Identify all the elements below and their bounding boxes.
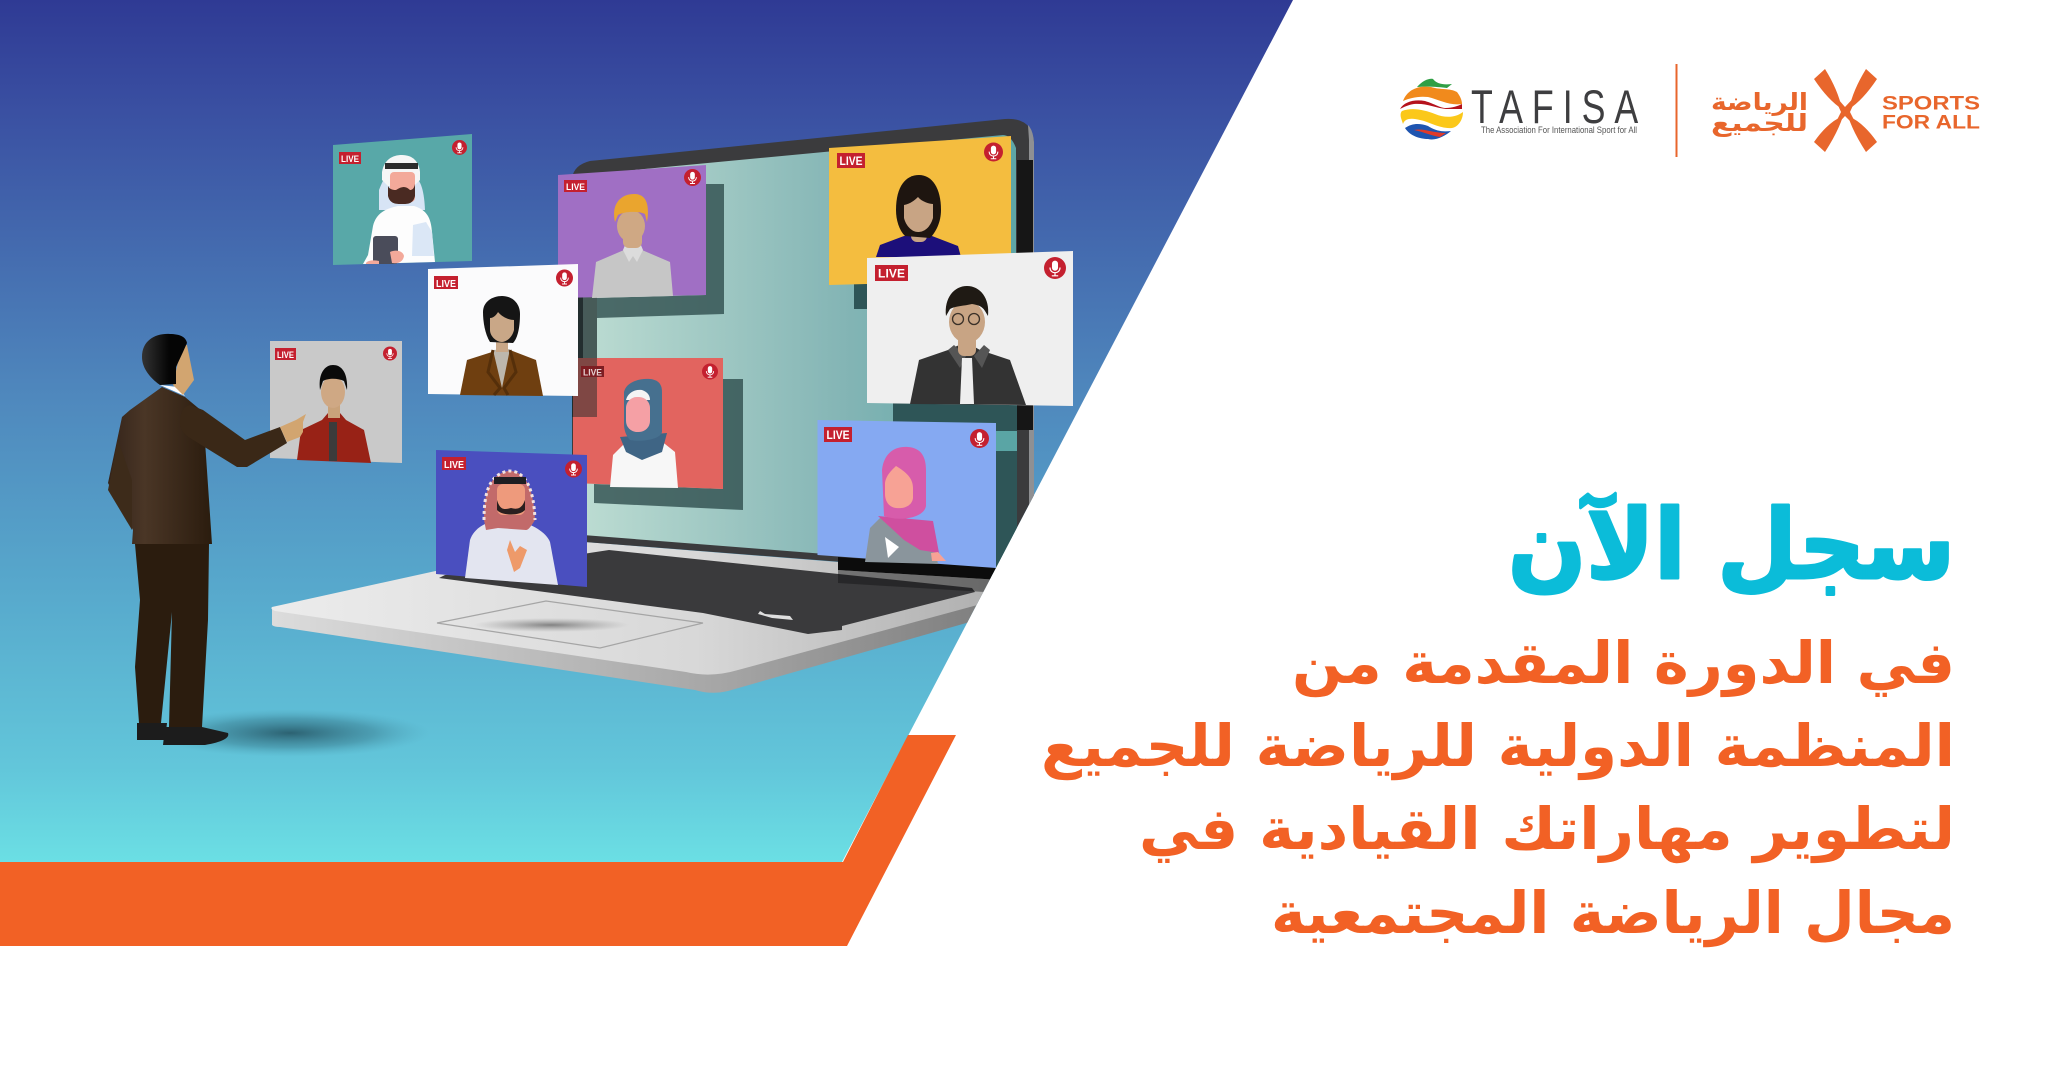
laptop illustration — [271, 119, 1040, 693]
live badge: LIVE — [341, 154, 359, 165]
keyboard — [439, 550, 975, 634]
arm — [180, 405, 287, 467]
trackpad — [437, 601, 703, 648]
neck — [173, 345, 194, 395]
hair — [142, 334, 187, 385]
logo: Sports for All: FOR ALL — [1882, 112, 1980, 134]
icon: microphone — [702, 364, 718, 380]
English wordmark: SPORTS — [1882, 94, 1980, 114]
live badge: LIVE — [566, 182, 585, 193]
video card: white, woman in brown jacket — [428, 264, 578, 396]
video card: grey, man in red shirt — [270, 341, 402, 463]
icon: microphone — [452, 140, 467, 155]
icon: microphone — [984, 142, 1003, 162]
logo: Sports for All — [1711, 69, 1980, 152]
live badge: LIVE — [840, 156, 863, 168]
live badge: LIVE — [436, 278, 456, 290]
video card: yellow, woman — [829, 136, 1011, 285]
laptop base — [271, 541, 1040, 693]
live badge: LIVE — [277, 350, 294, 360]
icon: microphone — [383, 346, 397, 360]
body text: في الدورة المقدمة من — [1292, 629, 1955, 698]
X mark — [1814, 69, 1877, 152]
live badge: LIVE — [583, 368, 602, 378]
video card: light grey, man with glasses — [867, 251, 1073, 406]
collar — [160, 385, 185, 396]
person — [297, 365, 371, 463]
icon: microphone — [1044, 257, 1066, 279]
person — [465, 471, 558, 585]
Arabic wordmark: الرياضة — [1711, 88, 1808, 116]
floor shadow — [150, 709, 430, 757]
hand — [280, 414, 306, 442]
person — [876, 175, 961, 257]
video card: teal, man in thobe — [333, 134, 472, 265]
TAFISA tagline: The Association For International Sport for All — [1481, 125, 1637, 136]
video card: red, woman with hijab — [572, 358, 723, 489]
icon: microphone — [565, 460, 582, 478]
blue gradient diagonal panel — [0, 0, 1293, 862]
live badge: LIVE — [878, 266, 905, 280]
icon: microphone — [684, 169, 701, 186]
icon: TAFISA globe — [1400, 79, 1463, 139]
card shadows on screen — [572, 160, 1033, 595]
person — [610, 379, 678, 488]
body text: المنظمة الدولية للرياضة للجميع — [1041, 712, 1955, 781]
businessman figure — [108, 334, 430, 757]
video card: purple, blond man — [558, 165, 706, 298]
video card: blue, man in shemagh — [436, 450, 587, 587]
jacket — [108, 387, 212, 544]
trousers — [135, 544, 209, 727]
person — [910, 286, 1026, 405]
person — [865, 447, 946, 564]
orange ribbon — [0, 735, 956, 946]
shoes — [137, 723, 228, 745]
live badge: LIVE — [826, 430, 850, 442]
heading: سجل الآن — [1508, 489, 1955, 601]
body text: مجال الرياضة المجتمعية — [1271, 879, 1955, 948]
body text: لتطوير مهاراتك القيادية في — [1139, 795, 1955, 864]
person — [363, 155, 435, 264]
laptop screen — [583, 135, 1016, 569]
laptop screen bezel — [572, 119, 1034, 577]
logo: TAFISA — [1400, 79, 1638, 139]
body text — [1041, 629, 1955, 948]
TAFISA wordmark: TAFISA — [1471, 80, 1638, 133]
logo: Sports for All: للجميع — [1711, 109, 1808, 137]
person — [460, 296, 543, 396]
video card: light blue, woman in pink hijab — [818, 420, 996, 568]
icon: microphone — [970, 429, 989, 448]
logo divider — [1676, 64, 1678, 157]
live badge: LIVE — [444, 459, 464, 471]
person — [592, 194, 673, 298]
icon: microphone — [556, 270, 573, 286]
